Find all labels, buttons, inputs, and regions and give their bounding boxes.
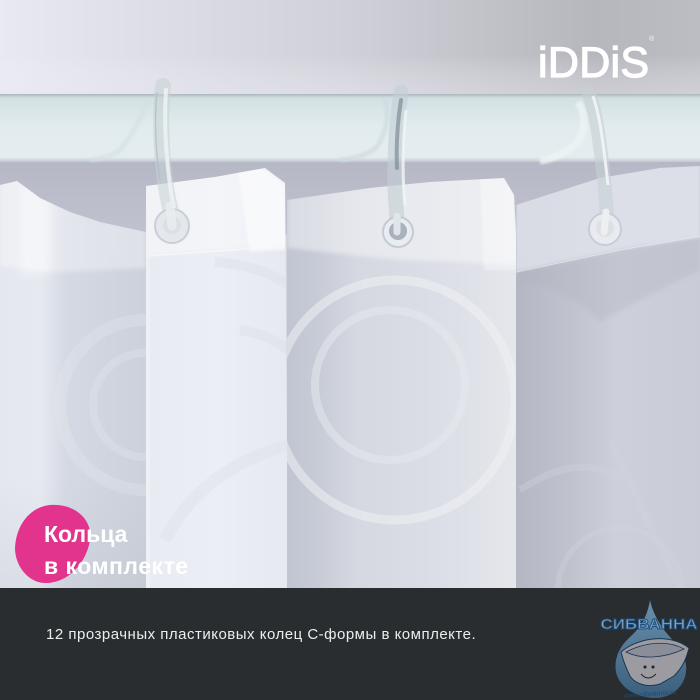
icon: water drop	[616, 600, 686, 698]
icon: tub face	[641, 666, 656, 678]
logo url: www.sibvanna.ru	[622, 689, 677, 700]
curtain: right panel	[516, 166, 700, 588]
icon: tub inner rim	[626, 643, 684, 657]
ring 2	[383, 92, 413, 247]
curtain: middle panel	[275, 170, 518, 590]
logo name: СИБВАННА	[600, 616, 698, 633]
curtain: left panel	[0, 181, 146, 588]
brand logo: ®	[649, 36, 654, 43]
ring 3	[589, 94, 621, 245]
icon: bathtub	[621, 639, 689, 686]
callout: pink circle	[15, 505, 90, 583]
brand logo: iDDiS	[538, 39, 649, 87]
curtain rod	[0, 94, 700, 162]
curtain: front fold	[146, 165, 288, 590]
callout heading: в комплекте	[44, 553, 189, 579]
bottom bar	[0, 588, 700, 700]
ring 1	[155, 86, 189, 243]
logo: sibvanna bathtub	[600, 600, 698, 700]
description text: 12 прозрачных пластиковых колец С-формы в комплекте.	[46, 626, 476, 643]
callout heading: Кольца	[44, 521, 127, 547]
callout heading	[44, 521, 189, 579]
